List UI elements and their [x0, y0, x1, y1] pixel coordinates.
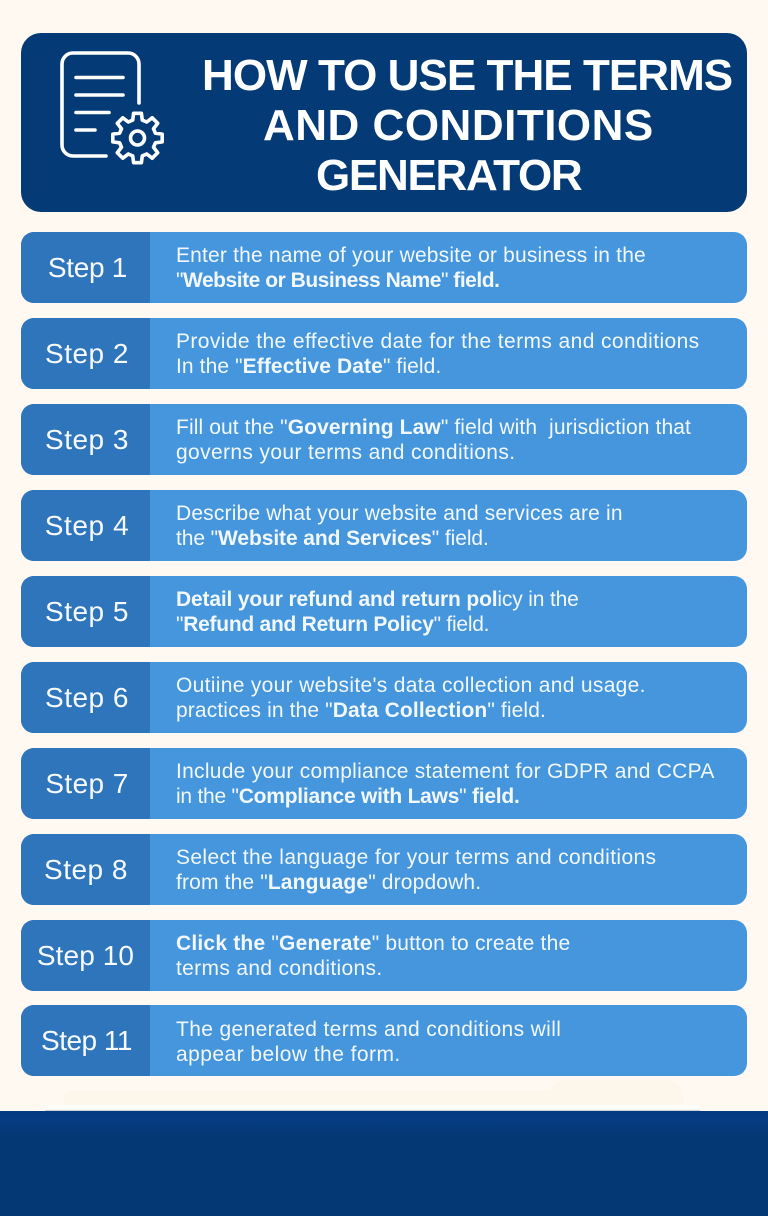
step 3 label [21, 404, 150, 475]
step 3 label: Step 3 [45, 424, 129, 455]
step 3 description: governs your terms and conditions. [176, 441, 515, 464]
step 10 label [21, 920, 150, 991]
step 8 [21, 834, 747, 905]
step 4 [21, 490, 747, 561]
step 3 description: Fill out the "Governing Law" field with jurisdiction that [176, 416, 691, 439]
step 5 description: Detail your refund and return policy in the [176, 588, 579, 611]
step 3 [21, 404, 747, 475]
step 7 label: Step 7 [45, 768, 129, 799]
step 2 description: In the "Effective Date" field. [176, 355, 441, 378]
header panel [21, 33, 747, 212]
step 5 description: "Refund and Return Policy" field. [176, 613, 489, 636]
step 8 label: Step 8 [44, 854, 128, 885]
step 5 [21, 576, 747, 647]
step 3 description [176, 416, 691, 464]
step 11 description: The generated terms and conditions will [176, 1018, 561, 1041]
title: HOW TO USE THE TERMS [202, 51, 732, 100]
step 8 description: from the "Language" dropdowh. [176, 871, 481, 894]
step 2 label [21, 318, 150, 389]
step 7 label [21, 748, 150, 819]
step 5 description [176, 588, 579, 636]
step 6 label: Step 6 [45, 682, 129, 713]
step 5 label: Step 5 [45, 596, 129, 627]
step 10 description: Click the "Generate" button to create the [176, 932, 570, 955]
step 11 label [21, 1005, 150, 1076]
step 4 description [176, 502, 623, 550]
step 1 description: "Website or Business Name" field. [176, 269, 499, 292]
step 1 description: Enter the name of your website or business in the [176, 244, 646, 267]
step 4 label: Step 4 [45, 510, 129, 541]
step 1 label [21, 232, 150, 303]
step 4 description: the "Website and Services" field. [176, 527, 489, 550]
step 11 [21, 1005, 747, 1076]
step 11 description: appear below the form. [176, 1043, 401, 1066]
step 5 label [21, 576, 150, 647]
background haze above footer [64, 1090, 684, 1106]
step 2 description: Provide the effective date for the terms and conditions [176, 330, 700, 353]
step 4 label [21, 490, 150, 561]
step 8 description [176, 846, 656, 894]
step 10 description [176, 932, 570, 980]
step 8 description: Select the language for your terms and conditions [176, 846, 656, 869]
step 1 description [176, 244, 646, 292]
title: GENERATOR [316, 151, 581, 200]
step 6 [21, 662, 747, 733]
step 4 description: Describe what your website and services are in [176, 502, 623, 525]
step 10 label: Step 10 [37, 940, 134, 971]
step 11 label: Step 11 [41, 1025, 132, 1056]
footer band [0, 1111, 768, 1216]
step 1 [21, 232, 747, 303]
icon: document with gear [60, 51, 164, 164]
step 7 [21, 748, 747, 819]
step 10 [21, 920, 747, 991]
light band above footer [45, 1105, 700, 1111]
step 7 description [176, 760, 715, 808]
step 7 description: Include your compliance statement for GDPR and CCPA [176, 760, 715, 783]
title [202, 51, 732, 200]
title: AND CONDITIONS [263, 101, 654, 150]
step 10 description: terms and conditions. [176, 957, 383, 980]
step 11 description [176, 1018, 561, 1066]
step 6 description: Outiine your website's data collection and usage. [176, 674, 646, 697]
background haze right side [550, 1080, 682, 1096]
step 6 description: practices in the "Data Collection" field. [176, 699, 546, 722]
step 6 description [176, 674, 646, 722]
step 2 label: Step 2 [45, 338, 129, 369]
step 1 label: Step 1 [48, 252, 127, 283]
step 6 label [21, 662, 150, 733]
step 2 [21, 318, 747, 389]
step 2 description [176, 330, 700, 378]
step 8 label [21, 834, 150, 905]
step 7 description: in the "Compliance with Laws" field. [176, 785, 520, 808]
